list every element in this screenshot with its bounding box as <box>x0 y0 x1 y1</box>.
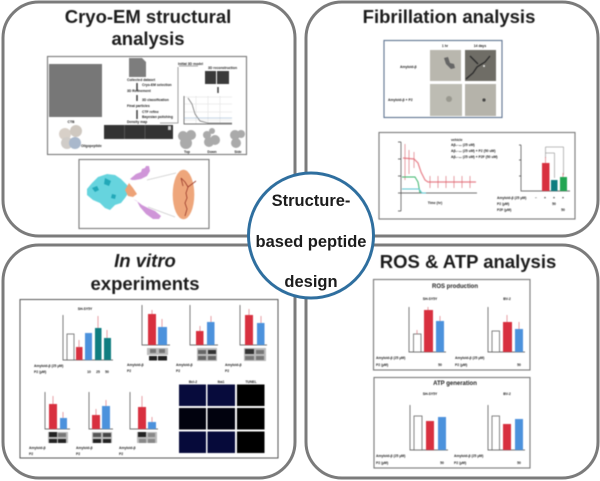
fluorescence image grid: Bcl-2 <box>189 380 197 384</box>
ATP generation figure <box>374 378 530 468</box>
rotated views: Down <box>207 150 217 154</box>
fluorescence image grid: TUNEL <box>245 380 257 384</box>
chart: ROS BV-2: Amyloid-β (25 μM) <box>455 356 484 360</box>
chart: ROS SH-SY5Y: 50 <box>438 363 442 367</box>
particle stack <box>129 58 146 77</box>
chart: p-AKT: Amyloid-β <box>176 363 193 367</box>
chart: viability: 50 <box>105 370 109 374</box>
ATP generation figure: SH-SY5Y <box>423 392 438 396</box>
bar chart: + <box>544 196 546 200</box>
fluorescence image grid: Iba1 <box>218 380 225 384</box>
chart: p-GSK: P2 <box>225 369 229 373</box>
bar chart: + <box>553 196 555 200</box>
bar chart: + <box>562 196 564 200</box>
bar chart: 50 <box>561 208 565 212</box>
heading: In vitro experiments: In vitro <box>114 250 176 271</box>
ATP generation figure: ATP generation <box>433 381 477 387</box>
ROS production figure: ROS production <box>432 284 478 290</box>
workflow labels: 3D classification <box>142 98 169 102</box>
chart: ATP BV-2 <box>454 405 525 465</box>
TEM images figure: 14 days <box>474 44 486 48</box>
CTB model: CTB <box>68 120 75 124</box>
heading: Cryo-EM structural analysis: analysis <box>111 28 185 49</box>
chart: ATP SH-SY5Y: Amyloid-β (25 μM) <box>376 454 405 458</box>
workflow labels: Cryo-EM selection <box>142 83 172 87</box>
TEM images figure: Amyloid-β + P2 <box>388 98 413 102</box>
ROS production figure: BV-2 <box>503 297 511 301</box>
workflow labels <box>127 78 173 124</box>
line chart: Aβ₁₋₄₂ (25 uM) + P2 (50 uM) <box>451 149 495 153</box>
TEM image: amyloid 1 hr <box>430 50 461 81</box>
ROS production figure <box>374 280 530 370</box>
chart: viability <box>34 307 113 374</box>
TEM images figure: Amyloid-β <box>400 65 417 69</box>
workflow labels: CTF refine <box>142 110 159 114</box>
TEM images figure <box>384 40 502 118</box>
chart: viability: Amyloid-β (25 μM) <box>34 364 63 368</box>
workflow labels: 3D Refinement <box>127 89 152 93</box>
chart: cleaved caspase-3: Amyloid-β <box>119 446 136 450</box>
chart: ATP SH-SY5Y: 50 <box>440 461 444 465</box>
bar chart: P2F (μM) <box>497 208 511 212</box>
line chart: Aβ₁₋₄₂ (25 uM) + P2F (50 uM) <box>451 155 498 159</box>
workflow labels: Final particles <box>127 104 150 108</box>
heading: In vitro experiments: experiments <box>90 273 200 294</box>
chart: Bcl-2 <box>76 392 113 456</box>
chart: Bax <box>29 392 70 456</box>
chart: p-GSK <box>225 305 267 373</box>
chart: p-AKT <box>176 305 218 373</box>
TEM images figure: 1 hr <box>442 44 449 48</box>
line chart: vehicle <box>451 138 463 142</box>
heading: Fibrillation analysis: Fibrillation analysis <box>363 6 535 27</box>
workflow labels: Bayesian polishing <box>142 115 173 119</box>
bar chart: P2 (μM) <box>497 202 509 206</box>
chart: p-GSK: Amyloid-β <box>225 363 242 367</box>
bar chart: Amyloid-β (25 μM) <box>497 196 526 200</box>
rotated views: Top <box>184 150 190 154</box>
chart: Bcl-2: Amyloid-β <box>76 446 93 450</box>
cryo-EM workflow figure: Initial 3D model <box>178 62 203 66</box>
orange interface <box>125 183 137 197</box>
chart: ATP BV-2: 50 <box>517 461 521 465</box>
chart: ROS SH-SY5Y <box>376 307 446 367</box>
micrograph <box>49 64 102 117</box>
chart: viability: 10 <box>87 370 91 374</box>
chart: cleaved caspase-3: P2 <box>119 452 123 456</box>
central circle: Structure-based peptide design: based peptide <box>256 233 366 251</box>
panel: In vitro experiments <box>3 245 295 478</box>
central circle: Structure-based peptide design <box>248 173 374 298</box>
chart: Bcl-2: P2 <box>76 452 80 456</box>
chart: ATP BV-2: P2 (μM) <box>454 461 466 465</box>
TEM image: amyloid 14 days <box>465 50 496 81</box>
line chart <box>398 138 498 211</box>
line chart: Aβ₁₋₄₂ (25 uM) <box>451 143 475 147</box>
chart: viability: P2 (μM) <box>34 370 46 374</box>
chart: ROS BV-2 <box>455 307 525 367</box>
chart: ATP BV-2: Amyloid-β (25 μM) <box>454 454 483 458</box>
TEM image: amyloid + P2 1 hr <box>430 84 462 116</box>
heading: ROS & ATP analysis: ROS & ATP analysis <box>380 251 556 272</box>
cyan protein surface <box>87 174 129 210</box>
panel: Fibrillation analysis <box>306 2 598 236</box>
chart: ATP SH-SY5Y <box>376 405 448 465</box>
ATP generation figure: BV-2 <box>503 392 511 396</box>
chart: viability: SH-SY5Y <box>78 307 93 311</box>
panel: ROS & ATP analysis <box>306 245 598 478</box>
protein-peptide complex figure <box>79 160 209 228</box>
TEM image: amyloid + P2 14 days <box>465 84 496 116</box>
chart: p-AKT: P2 <box>176 369 180 373</box>
purple chain lower <box>133 199 161 219</box>
chart: Bax: P2 <box>29 452 33 456</box>
class averages <box>205 71 216 84</box>
chart: p-ERK <box>127 305 170 373</box>
western blot and viability figure <box>20 300 278 458</box>
panel: Cryo-EM structural analysis <box>3 2 295 236</box>
fluorescence image grid <box>179 380 264 453</box>
CTB model <box>59 120 102 149</box>
chart: ROS BV-2: 50 <box>517 363 521 367</box>
rotated views: Side <box>234 150 242 154</box>
chart: Bax: Amyloid-β <box>29 446 46 450</box>
rotated views <box>178 128 245 154</box>
ROS production figure: SH-SY5Y <box>423 297 438 301</box>
2D class strip <box>104 125 173 139</box>
zoomed orange ellipse with peptide <box>173 170 194 219</box>
heading: Cryo-EM structural analysis: Cryo-EM structural <box>65 6 231 27</box>
workflow labels: Density map <box>127 120 147 124</box>
chart: cleaved caspase-3 <box>119 392 158 456</box>
central circle: Structure-based peptide design: design <box>284 273 338 291</box>
ThT kinetics and bar chart figure <box>379 132 575 219</box>
purple chain upper <box>130 166 150 180</box>
cryo-EM workflow figure <box>48 56 246 154</box>
chart: p-ERK: Amyloid-β <box>127 363 144 367</box>
chart: p-ERK: P2 <box>127 369 131 373</box>
CTB model: Oligopeptide <box>81 144 102 148</box>
class average right <box>217 71 229 84</box>
central circle: Structure-based peptide design: Structure- <box>272 192 350 210</box>
FSC curve <box>184 96 232 124</box>
chart: ROS BV-2: P2 (μM) <box>455 363 467 367</box>
chart: viability: 25 <box>96 370 100 374</box>
bar chart: − <box>535 196 537 200</box>
bar chart: 50 <box>552 202 556 206</box>
cryo-EM workflow figure: 3D reconstruction <box>208 66 237 70</box>
workflow labels: Collected dataset <box>127 78 156 82</box>
chart: ATP SH-SY5Y: P2 (μM) <box>376 461 388 465</box>
line chart: Time (hr) <box>428 201 442 205</box>
chart: ROS SH-SY5Y: Amyloid-β (25 μM) <box>376 356 405 360</box>
chart: ROS SH-SY5Y: P2 (μM) <box>376 363 388 367</box>
bar chart <box>497 145 570 212</box>
